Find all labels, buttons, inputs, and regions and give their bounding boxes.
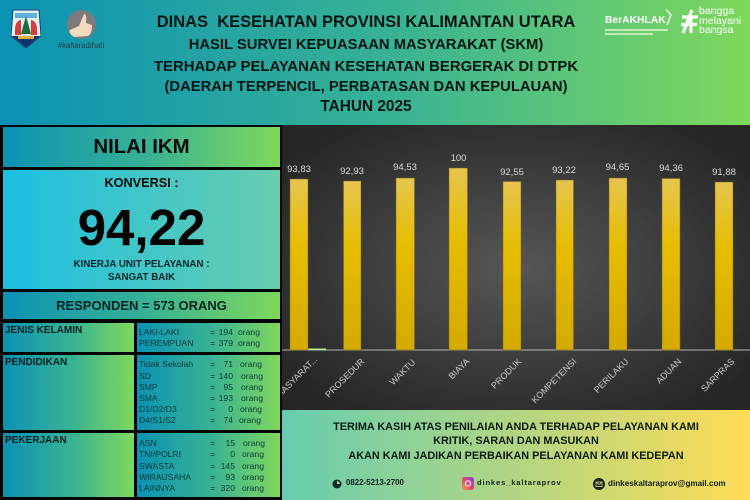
panel: pekerjaan values: orang <box>243 438 265 448</box>
panel: pendidikan values: = <box>210 404 215 414</box>
category labels: PERILAKU <box>592 356 630 395</box>
panel: pendidikan values: orang <box>239 414 261 424</box>
logo: thumbs up #kaltaradihati: #kaltaradihati <box>58 41 104 50</box>
panel: pekerjaan values: = <box>210 438 215 448</box>
panel: pekerjaan values: ASN <box>139 438 157 448</box>
score value: 94,22 <box>78 199 205 256</box>
header band <box>0 0 750 125</box>
title: (DAERAH TERPENCIL, PERBATASAN DAN KEPULAUAN) <box>164 79 568 95</box>
logo: bangga melayani bangsa: bangsa <box>699 24 733 36</box>
title: DINAS KESEHATAN PROVINSI KALIMANTAN UTARA <box>157 13 575 31</box>
panel: jenis kelamin values: 194 <box>219 326 233 336</box>
panel: pendidikan values: orang <box>240 404 262 414</box>
logo: bangga melayani bangsa <box>681 5 741 36</box>
panel: pendidikan values: = <box>210 414 215 424</box>
category labels: KOMPETENSI <box>530 356 578 405</box>
panel: pendidikan values: 74 <box>223 414 233 424</box>
icon: phone <box>332 480 342 488</box>
panel: jenis kelamin values: = <box>210 326 215 336</box>
panel: pendidikan values: D4/S1/S2 <box>139 414 176 424</box>
panel: nilai IKM heading <box>3 127 280 167</box>
contact: phone <box>332 478 404 488</box>
panel: pendidikan values: = <box>210 382 215 392</box>
panel: pendidikan values: = <box>210 370 215 380</box>
panel: pendidikan label <box>3 355 134 430</box>
panel: pendidikan values: orang <box>240 358 262 368</box>
icon: instagram <box>462 477 474 490</box>
category labels: ADUAN <box>654 356 683 386</box>
panel: pendidikan values: 140 <box>219 370 233 380</box>
panel: pendidikan values: 0 <box>228 404 233 414</box>
category labels: BIAYA <box>447 356 471 381</box>
panel: pekerjaan values: orang <box>242 472 264 482</box>
panel: pendidikan values: Tidak Sekolah <box>139 358 193 368</box>
panel: jenis kelamin values: = <box>210 338 215 348</box>
value labels: 92,93 <box>340 166 364 177</box>
logo: BerAKHLAK: BerAKHLAK <box>605 15 666 26</box>
panel: pekerjaan values: 145 <box>221 460 235 470</box>
panel: pekerjaan values: 93 <box>225 472 235 482</box>
contact: instagram <box>462 477 562 490</box>
performance rating: KINERJA UNIT PELAYANAN : <box>73 259 210 270</box>
thank you message: TERIMA KASIH ATAS PENILAIAN ANDA TERHADAP PELAYANAN KAMI <box>333 420 699 432</box>
value labels: 94,65 <box>606 162 629 173</box>
panel: jenis kelamin label: JENIS KELAMIN <box>5 325 82 336</box>
contact: email: dinkeskaltaraprov@gmail.com <box>608 479 726 488</box>
performance rating: SANGAT BAIK <box>108 272 175 283</box>
panel: jenis kelamin values: orang <box>238 326 260 336</box>
panel: pekerjaan values: = <box>210 460 215 470</box>
panel: jenis kelamin values: 379 <box>219 338 233 348</box>
panel: pekerjaan values: 320 <box>221 482 235 492</box>
bars <box>290 168 733 350</box>
panel: pendidikan values: orang <box>241 370 263 380</box>
panel: pekerjaan values: = <box>210 448 215 458</box>
label: konversi: KONVERSI : <box>104 176 179 190</box>
category labels: PROSEDUR <box>323 356 367 399</box>
panel: pekerjaan values: 0 <box>230 448 235 458</box>
bar chart <box>282 125 750 410</box>
logo: BerAKHLAK <box>605 9 672 35</box>
panel: pekerjaan values: 15 <box>225 438 235 448</box>
value labels: 93,83 <box>287 164 311 175</box>
contact: email <box>593 478 726 490</box>
panel: pekerjaan values: orang <box>242 460 264 470</box>
panel: responden total: RESPONDEN = 573 ORANG <box>56 298 227 313</box>
panel: pekerjaan values: SWASTA <box>139 460 174 470</box>
category labels: WAKTU <box>388 357 417 387</box>
panel: nilai IKM heading: NILAI IKM <box>93 136 190 158</box>
title: HASIL SURVEI KEPUASAAN MASYARAKAT (SKM) <box>189 37 543 53</box>
logo: provincial crest <box>11 10 41 48</box>
panel: pendidikan values: orang <box>241 382 263 392</box>
panel: pendidikan values: SMP <box>139 382 158 392</box>
panel: jenis kelamin values <box>137 323 280 352</box>
category labels: SARPRAS <box>699 356 736 394</box>
thank you message: AKAN KAMI JADIKAN PERBAIKAN PELAYANAN KAMI KEDEPAN <box>348 450 684 462</box>
panel: pekerjaan values <box>137 433 280 497</box>
value labels: 91,88 <box>712 167 736 178</box>
thank you message <box>333 420 699 462</box>
panel: thank you footer <box>282 410 750 500</box>
panel: pendidikan values: = <box>210 358 215 368</box>
value labels: 100 <box>451 153 466 164</box>
panel: pendidikan values: = <box>210 392 215 402</box>
thank you message: KRITIK, SARAN DAN MASUKAN <box>433 435 599 447</box>
title: TAHUN 2025 <box>320 98 412 115</box>
category labels: PRODUK <box>489 356 523 391</box>
panel: konversi score <box>3 170 280 289</box>
logo: bangga melayani bangsa: melayani <box>699 14 741 26</box>
panel: jenis kelamin values: orang <box>238 338 260 348</box>
panel: pekerjaan values: orang <box>242 482 264 492</box>
panel: pendidikan values: orang <box>241 392 263 402</box>
panel: pekerjaan values: TNI/POLRI <box>139 448 181 458</box>
category labels <box>274 354 736 405</box>
contact: phone: 0822-5213-2700 <box>346 478 404 487</box>
panel: pendidikan values: SMA <box>139 392 158 402</box>
panel: pekerjaan values: LAINNYA <box>139 482 175 492</box>
panel: pekerjaan label: PEKERJAAN <box>5 435 67 446</box>
panel: jenis kelamin values: PEREMPUAN <box>139 338 193 348</box>
panel: pendidikan label: PENDIDIKAN <box>5 357 67 368</box>
title <box>154 13 578 115</box>
panel: pendidikan values: 95 <box>223 382 233 392</box>
panel: jenis kelamin values: LAKI-LAKI <box>139 326 179 336</box>
icon: email <box>593 478 605 490</box>
panel: pendidikan values: D1/D2/D3 <box>139 404 177 414</box>
value labels: 92,55 <box>500 167 524 178</box>
contact: instagram: dinkes_kaltaraprov <box>477 478 562 487</box>
value labels <box>287 153 736 178</box>
logo: bangga melayani bangsa: bangga <box>699 5 734 17</box>
panel: pendidikan values: 71 <box>223 358 233 368</box>
value labels: 94,36 <box>659 163 683 174</box>
panel: jenis kelamin label <box>3 323 134 352</box>
panel: pekerjaan values: orang <box>242 448 264 458</box>
panel: pekerjaan values: = <box>210 482 215 492</box>
panel: pendidikan values <box>137 355 280 430</box>
panel: pekerjaan values: WIRAUSAHA <box>139 472 191 482</box>
panel: pendidikan values: SD <box>139 370 151 380</box>
performance rating <box>73 259 210 283</box>
panel: pendidikan values: 193 <box>219 392 233 402</box>
panel: pekerjaan values: = <box>210 472 215 482</box>
value labels: 94,53 <box>393 162 417 173</box>
minor green bar <box>308 348 326 350</box>
title: TERHADAP PELAYANAN KESEHATAN BERGERAK DI DTPK <box>154 59 578 75</box>
panel: pekerjaan label <box>3 433 134 497</box>
value labels: 93,22 <box>552 165 576 176</box>
logo: thumbs up #kaltaradihati <box>58 10 104 50</box>
panel: responden total <box>3 292 280 319</box>
